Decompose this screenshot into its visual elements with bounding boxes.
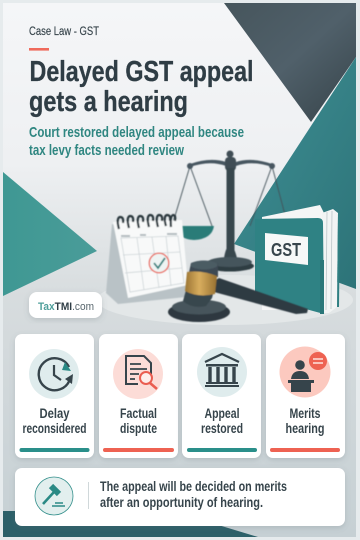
conclusion banner	[15, 468, 345, 526]
label: Delay	[40, 405, 70, 421]
icon: gavel badge	[35, 477, 73, 515]
illustration: scales of justice	[172, 150, 288, 272]
label	[201, 405, 243, 436]
accent bar	[187, 448, 257, 452]
accent bar	[270, 448, 340, 452]
label: Appeal	[204, 405, 240, 421]
folder label: GST	[271, 240, 301, 260]
label: hearing	[286, 420, 324, 436]
label: Merits	[290, 405, 321, 421]
bottom dark band	[3, 511, 258, 537]
logo badge	[29, 292, 102, 318]
illustration: GST folder	[255, 205, 340, 314]
dark corner shape	[224, 3, 356, 122]
card: appeal restored	[182, 334, 261, 458]
subtitle: tax levy facts needed review	[29, 142, 184, 159]
floor ellipse	[97, 275, 353, 325]
title: gets a hearing	[29, 86, 188, 118]
teal left triangle	[3, 172, 97, 296]
icon: document search	[113, 349, 163, 399]
teal right shape	[234, 57, 356, 289]
label	[120, 405, 157, 436]
label: Factual	[120, 405, 157, 421]
illustration: calendar	[106, 215, 188, 304]
banner text	[100, 478, 287, 510]
accent bar	[29, 48, 49, 51]
card: merits hearing	[266, 334, 345, 458]
subtitle	[29, 124, 244, 159]
subtitle: Court restored delayed appeal because	[29, 124, 244, 141]
banner text: after an opportunity of hearing.	[100, 494, 263, 510]
divider	[87, 482, 90, 509]
label: restored	[201, 420, 243, 436]
illustration: gavel	[168, 260, 308, 322]
logo badge: TaxTMI.com	[38, 301, 94, 313]
icon: clock	[29, 349, 79, 399]
accent bar	[103, 448, 174, 452]
card: factual dispute	[99, 334, 178, 458]
icon: courthouse	[197, 347, 247, 397]
icon: speaker at podium	[280, 346, 330, 398]
title: Delayed GST appeal	[30, 56, 254, 88]
small label: Case Law - GST	[29, 26, 99, 38]
accent bar	[20, 448, 90, 452]
label: reconsidered	[22, 420, 86, 436]
label	[22, 405, 86, 436]
banner text: The appeal will be decided on merits	[100, 478, 287, 494]
label	[286, 405, 324, 436]
title	[29, 56, 254, 118]
label: dispute	[120, 420, 157, 436]
card: delay reconsidered	[15, 334, 94, 458]
